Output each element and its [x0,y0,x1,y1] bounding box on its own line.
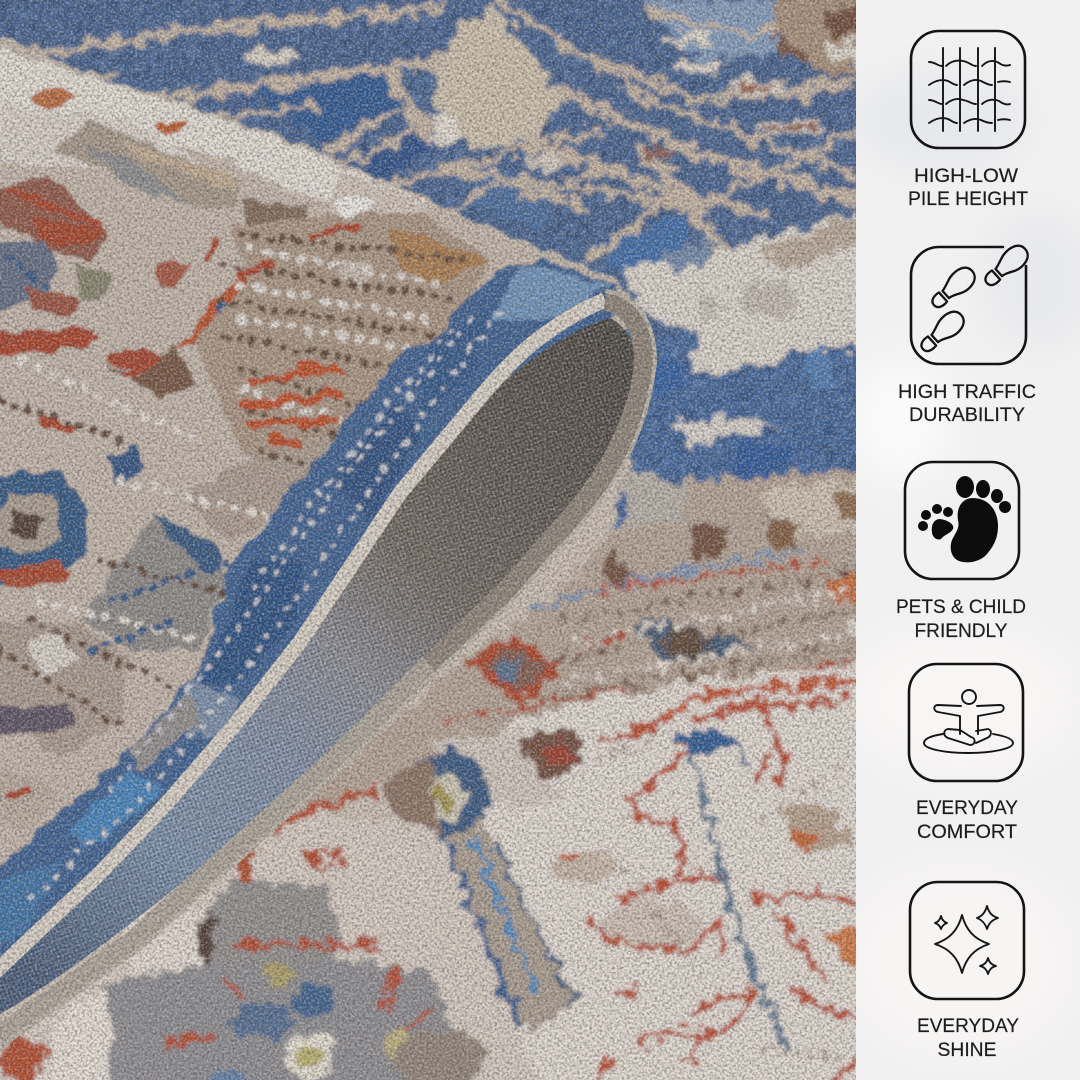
flap: base pile [0,36,634,867]
floor rug: blue medallion field [0,0,856,470]
label: high-low pile height: HIGH-LOW [914,166,1018,187]
floor rug: beige wedge [430,5,565,152]
icon: footprints [911,241,1032,364]
floor rug: tan lattice [0,0,856,260]
feature: high traffic durability [898,241,1036,426]
label: everyday shine: EVERYDAY [917,1016,1019,1037]
label: everyday comfort: EVERYDAY [916,798,1018,819]
flap: blue border band [0,258,625,970]
feature: high-low pile height [908,31,1028,210]
label: high-low pile height: PILE HEIGHT [908,189,1028,210]
floor rug: lower-left corner [0,760,540,1080]
label: high traffic durability: DURABILITY [909,405,1025,426]
floor rug: blue lower field [610,330,870,530]
feature: everyday comfort [909,664,1023,843]
floor rug: white star motif [621,209,856,379]
floor rug: cream field [430,665,870,1080]
icon: child foot and paw [905,462,1019,579]
flap outer binding [0,291,655,1050]
floor rug: flower with stripes [406,751,580,1032]
label: pets and child friendly: PETS & CHILD [896,597,1026,618]
label: pets and child friendly: FRIENDLY [914,621,1008,642]
flap: white border strip [0,45,427,215]
flap: scattered speckle [0,235,470,730]
carpet pile texture [0,0,856,1080]
icon: pile lines [911,31,1025,148]
floor rug: blue stem [690,745,790,1050]
icon: meditating figure [909,664,1023,781]
floor rug: red vine [590,700,870,1080]
sidebar panel [850,0,1080,1080]
feature: everyday shine [910,882,1024,1061]
flap: ornament colours [0,86,490,830]
floor rug: tan upper band [270,470,870,830]
label: high traffic durability: HIGH TRAFFIC [898,382,1036,403]
label: everyday comfort: COMFORT [917,822,1017,843]
feature: pets and child friendly [896,462,1026,642]
flap underside backing [0,318,636,1020]
icon: sparkles [910,882,1024,999]
label: everyday shine: SHINE [938,1040,996,1061]
rolled flap [0,37,640,980]
flap cream binding [0,300,605,972]
